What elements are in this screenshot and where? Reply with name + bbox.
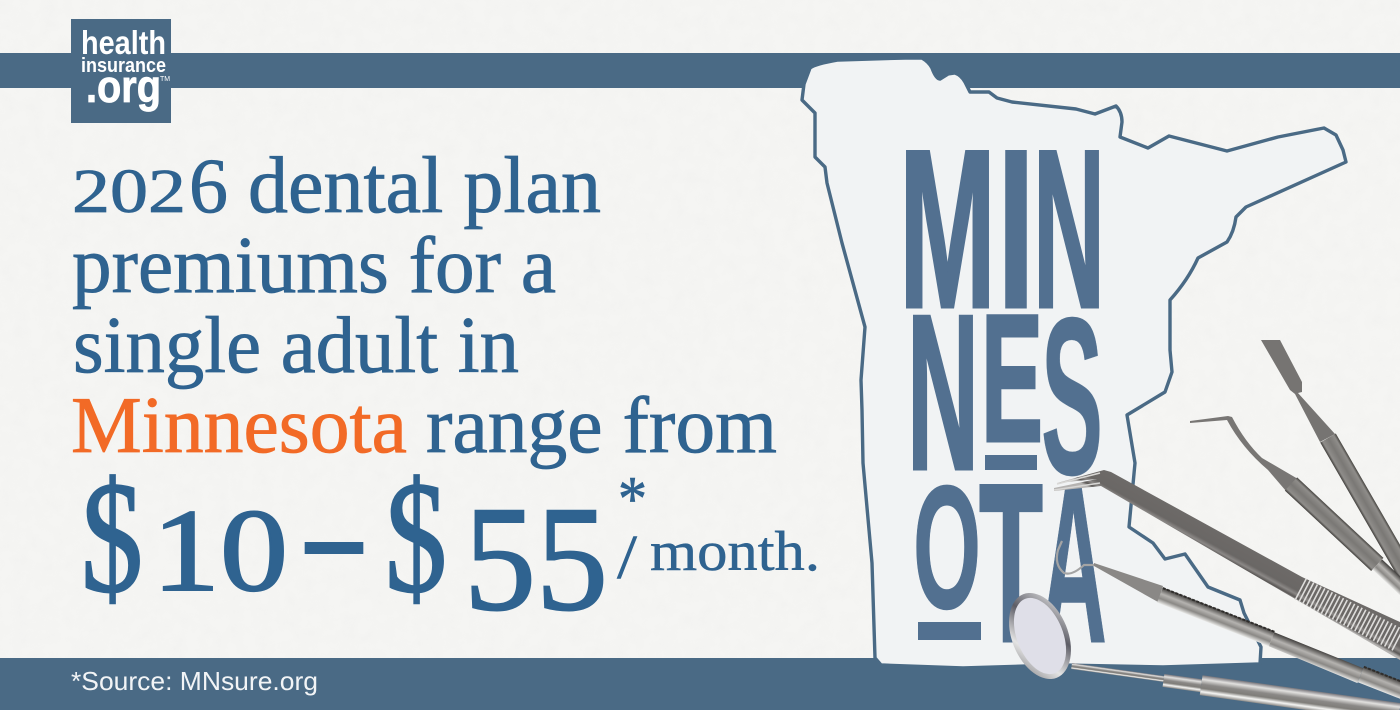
asterisk: * bbox=[618, 463, 647, 534]
heading line 1: 202 bbox=[72, 158, 186, 226]
text: A bbox=[1040, 437, 1107, 690]
tool: explorer bbox=[1190, 416, 1400, 605]
logo: healthinsurance.org: health bbox=[81, 24, 166, 61]
tool: tweezers bbox=[1054, 470, 1400, 660]
heading line 4: Minnesota bbox=[71, 382, 407, 470]
heading line 1: dental plan bbox=[248, 142, 601, 230]
per month label: / bbox=[617, 524, 638, 592]
heading line 3: single adult in bbox=[73, 302, 519, 390]
heading line 1: 6 bbox=[189, 142, 228, 229]
word: NES: E bbox=[981, 276, 1043, 480]
dental tools bbox=[997, 340, 1400, 710]
per month label: month. bbox=[650, 521, 820, 583]
word: OTA: O bbox=[913, 450, 981, 646]
price range: $ bbox=[385, 448, 447, 626]
logo: healthinsurance.org: .org bbox=[86, 61, 161, 112]
logo: healthinsurance.org: TM bbox=[160, 76, 170, 83]
price range: 55 bbox=[464, 476, 608, 642]
word: MIN: I bbox=[997, 102, 1035, 355]
word: NES: N bbox=[907, 269, 979, 517]
tool: probe bbox=[1057, 541, 1400, 705]
state name lettering bbox=[899, 102, 1107, 690]
logo: healthinsurance.org bbox=[71, 19, 171, 123]
price range: – bbox=[307, 469, 361, 602]
top banner bar bbox=[0, 53, 1400, 88]
bottom banner bar bbox=[0, 658, 1400, 710]
logo: healthinsurance.org: insurance bbox=[81, 55, 166, 77]
tool: mouth mirror bbox=[997, 584, 1400, 710]
price range: $ bbox=[81, 448, 143, 626]
map: Minnesota outline bbox=[802, 58, 1346, 668]
heading bbox=[71, 142, 777, 470]
source note: *Source: MNsure.org bbox=[71, 666, 318, 696]
word: OTA: T bbox=[979, 436, 1043, 689]
heading line 2: premiums for a bbox=[72, 222, 556, 310]
price range: 10 bbox=[152, 485, 288, 616]
heading line 4: range from bbox=[426, 382, 777, 470]
tool: spatula bbox=[1261, 340, 1400, 590]
word: MIN: M bbox=[899, 102, 996, 355]
text: N bbox=[1033, 102, 1105, 355]
text: S bbox=[1041, 270, 1103, 522]
